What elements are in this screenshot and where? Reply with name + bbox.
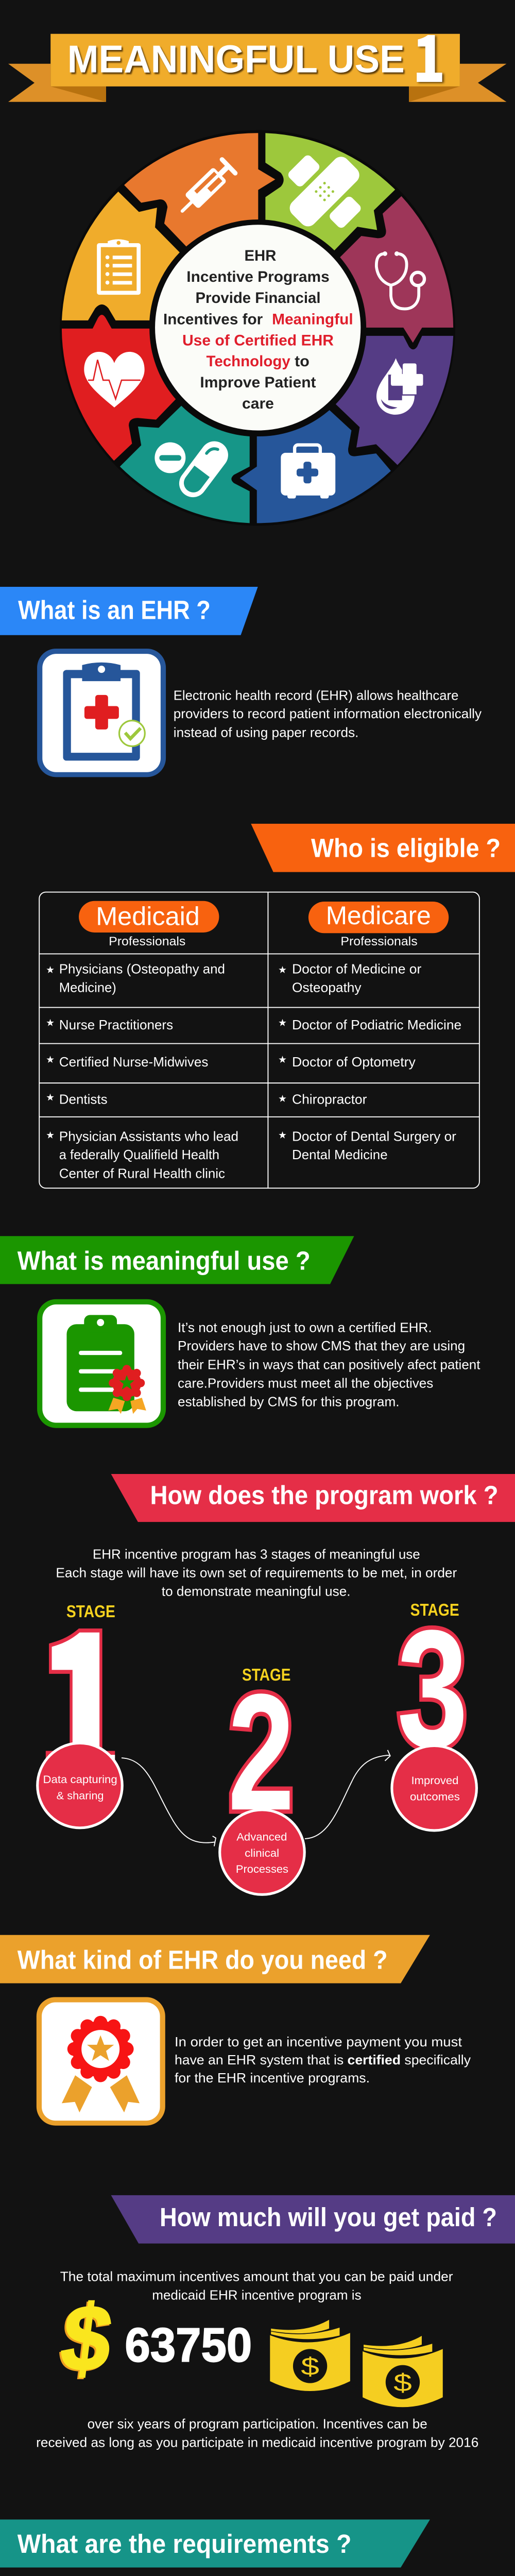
wheel centre circle (150, 219, 366, 436)
stage 3: outcomes (410, 1790, 460, 1803)
text: stages introduction: to demonstrate meaningful use. (162, 1584, 351, 1599)
wheel segment: pills (120, 406, 250, 523)
icon: clipboard with cross (37, 649, 166, 777)
list: Medicaid professionals: Physicians (Osteopathy and (59, 961, 225, 977)
heading: who is eligible: Who is eligible ? (311, 833, 501, 862)
wheel segment: clipboard (62, 192, 180, 320)
text: stages introduction: Each stage will have its own set of requirements to be met, in order (56, 1565, 457, 1580)
column header: Medicaid (79, 901, 219, 948)
column header: Medicare (308, 901, 449, 948)
wheel segment: first aid case (240, 410, 391, 523)
list: Medicaid professionals: Certified Nurse-Midwives (59, 1054, 208, 1070)
column header: Medicaid: Professionals (109, 935, 185, 948)
section: what is an EHR (0, 587, 482, 777)
column header: Medicaid: Medicaid (96, 902, 200, 930)
text: participation note: over six years of program participation. Incentives can be (88, 2416, 427, 2432)
column header: Medicare: Professionals (340, 935, 418, 948)
title text: MEANINGFUL USE (67, 37, 405, 80)
text: meaningful use explanation: their EHR’s in ways that can positively afect patient (178, 1357, 480, 1372)
text: certified EHR requirement: have an EHR system that is certified specifically (175, 2052, 471, 2067)
wheel segment: stethoscope (340, 196, 453, 343)
text: stages introduction: EHR incentive program has 3 stages of meaningful use (93, 1547, 420, 1562)
stage 1: STAGE (66, 1602, 115, 1621)
text: certified EHR requirement: for the EHR incentive programs. (175, 2070, 370, 2086)
icon: dollar sign: $ (56, 2287, 117, 2390)
text: participation note (36, 2416, 478, 2450)
wheel centre circle: Improve Patient (200, 374, 316, 391)
heading: what kind of EHR: What kind of EHR do you need ? (18, 1945, 388, 1974)
list: Medicaid professionals: Medicine) (59, 979, 116, 995)
list: Medicaid professionals (46, 961, 238, 1181)
wheel centre circle: Incentives for (163, 311, 263, 328)
column header: Medicare: Medicare (326, 901, 431, 930)
stage 1 (36, 1605, 124, 1829)
icon: money stack 1 (270, 2320, 350, 2391)
icon: money stack 2 (363, 2336, 443, 2407)
heading: how does the program work (111, 1474, 515, 1522)
text: certified EHR requirement: In order to get an incentive payment you must (175, 2034, 462, 2049)
text: stages introduction (56, 1547, 457, 1599)
text: EHR definition: instead of using paper records. (174, 725, 358, 740)
text: meaningful use explanation: established by CMS for this program. (178, 1394, 400, 1410)
list: Medicare professionals: Chiropractor (292, 1091, 367, 1107)
heading: what is an EHR: What is an EHR ? (18, 596, 211, 625)
text: meaningful use explanation: care.Providers must meet all the objectives (178, 1375, 433, 1391)
text: meaningful use explanation (178, 1320, 480, 1410)
list: Medicare professionals: Dental Medicine (292, 1147, 388, 1162)
icon: money stack 2: $ (393, 2369, 412, 2397)
wheel centre circle: to (295, 353, 310, 370)
text: certified EHR requirement (175, 2034, 471, 2086)
text: EHR definition (174, 687, 482, 740)
stage 2: Advanced (236, 1831, 287, 1843)
heading: what is meaningful use (0, 1236, 354, 1284)
stage 3: 3 (397, 1595, 468, 1783)
text: meaningful use explanation: Providers have to show CMS that they are using (178, 1338, 465, 1353)
stage 1: Data capturing (43, 1773, 117, 1786)
wheel centre circle: Technology (207, 353, 290, 370)
wheel segment: heart (62, 315, 176, 461)
text: participation note: received as long as you participate in medicaid incentive program by 2016 (36, 2434, 478, 2450)
wheel centre circle: Use of Certified EHR (182, 332, 334, 349)
list: Medicaid professionals: a federally Qualifield Health (59, 1147, 219, 1162)
icon: money stack 1: $ (301, 2353, 319, 2381)
stage 2: Processes (236, 1862, 288, 1875)
table: eligibility (39, 892, 479, 1188)
heading: how much will you get paid (111, 2195, 515, 2244)
arrow: stage 1 to stage 2 (122, 1758, 216, 1846)
list: Medicaid professionals: Center of Rural Health clinic (59, 1165, 225, 1181)
text: meaningful use explanation: It’s not enough just to own a certified EHR. (178, 1320, 432, 1335)
text: total incentive (60, 2268, 453, 2303)
stage 2: 2 (228, 1660, 295, 1845)
stage 1: 1 (37, 1541, 129, 1846)
amount: 63750: 63750 (125, 2318, 252, 2372)
section: what kind of EHR (0, 1935, 430, 2126)
list: Medicaid professionals: Physician Assistants who lead (59, 1128, 238, 1144)
wheel segment: drop and cross (336, 336, 453, 465)
stage 2 (220, 1660, 304, 1894)
icon: certified medal (37, 1997, 165, 2126)
icon: certified clipboard (37, 1299, 166, 1428)
heading: who is eligible (251, 824, 515, 872)
title ribbon (8, 34, 506, 102)
text: total incentive: medicaid EHR incentive program is (152, 2287, 362, 2303)
section: how much will you get paid (0, 2195, 515, 2567)
list: Medicare professionals: Doctor of Podiatric Medicine (292, 1017, 461, 1032)
list: Medicare professionals: Osteopathy (292, 979, 362, 995)
wheel centre circle: care (242, 395, 274, 412)
wheel centre circle: EHR (245, 247, 277, 264)
list: Medicaid professionals: Nurse Practitioners (59, 1017, 173, 1032)
text: EHR definition: Electronic health record (EHR) allows healthcare (174, 687, 458, 703)
heading: what are the requirements: What are the requirements ? (18, 2529, 351, 2558)
stage 2: STAGE (242, 1666, 290, 1685)
stage 2: clinical (245, 1846, 279, 1859)
heading: what kind of EHR (0, 1935, 430, 1984)
list: Medicare professionals: Doctor of Optometry (292, 1054, 416, 1070)
wheel centre circle: Meaningful (272, 311, 353, 328)
section: what is meaningful use (0, 1236, 480, 1428)
stage 3 (392, 1595, 476, 1831)
title numeral 1: 1 (413, 7, 445, 100)
wheel diagram (60, 130, 455, 526)
wheel centre circle: Provide Financial (195, 290, 320, 307)
stage 1: & sharing (57, 1789, 104, 1802)
icon: dollar sign: $ (55, 2288, 116, 2392)
stage 3: STAGE (410, 1601, 459, 1620)
wheel segment: bandage (265, 133, 395, 250)
arrow: stage 2 to stage 3 (305, 1750, 390, 1839)
list: Medicare professionals (279, 961, 461, 1162)
heading: what are the requirements (0, 2519, 430, 2567)
list: Medicare professionals: Doctor of Dental Surgery or (292, 1128, 456, 1144)
section: how does the program work (56, 1474, 515, 1599)
heading: what is an EHR (0, 587, 258, 635)
text: total incentive: The total maximum incentives amount that you can be paid under (60, 2268, 453, 2284)
list: Medicaid professionals: Dentists (59, 1091, 108, 1107)
list: Medicare professionals: Doctor of Medicine or (292, 961, 422, 977)
wheel segment: syringe (124, 133, 275, 246)
heading: what is meaningful use: What is meaningful use ? (18, 1246, 311, 1275)
stage 3: Improved (411, 1774, 458, 1787)
section: who is eligible (39, 824, 515, 1188)
text: EHR definition: providers to record patient information electronically (174, 706, 482, 721)
wheel centre circle: Incentive Programs (186, 268, 330, 285)
